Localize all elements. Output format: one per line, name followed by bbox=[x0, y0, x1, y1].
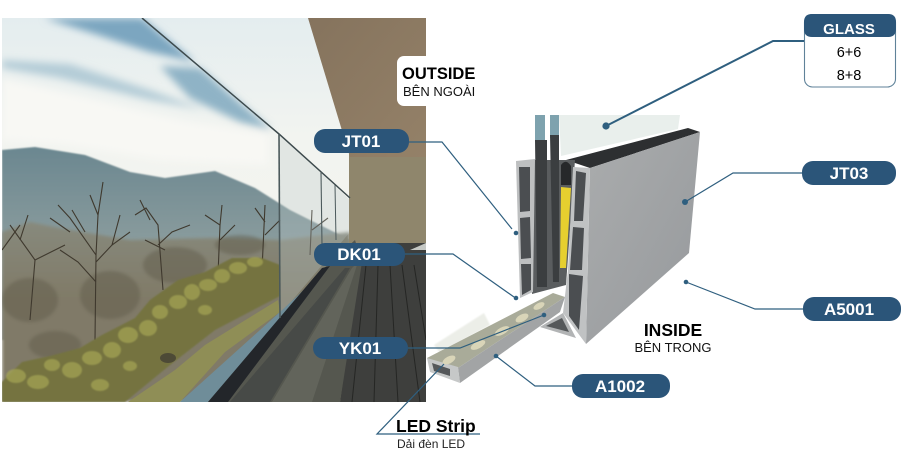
leader line bbox=[685, 173, 802, 202]
callout: A1002 bbox=[494, 354, 670, 398]
bushes bbox=[2, 258, 280, 402]
pill bbox=[314, 129, 409, 153]
deck boards bbox=[352, 265, 426, 402]
left chambers bbox=[519, 167, 531, 295]
outside vietnamese label: BÊN NGOÀI bbox=[403, 84, 475, 99]
leader line bbox=[405, 254, 514, 297]
dot bbox=[514, 231, 518, 235]
pill bbox=[802, 161, 896, 185]
pill label: DK01 bbox=[337, 245, 381, 264]
leader line bbox=[408, 315, 544, 348]
forest canopy shading bbox=[2, 235, 265, 359]
glass size 8+8: 8+8 bbox=[837, 68, 861, 84]
base foot bbox=[540, 313, 576, 338]
ceiling overhang bbox=[308, 18, 426, 157]
pill bbox=[572, 374, 670, 398]
right profile wall bbox=[563, 167, 590, 344]
glass box bbox=[804, 14, 896, 87]
pill bbox=[803, 297, 901, 321]
dot bbox=[602, 122, 610, 130]
glazing gaskets bbox=[535, 135, 559, 287]
callout: LED Strip bbox=[377, 364, 480, 451]
LED profile end bbox=[427, 358, 460, 383]
callout: OUTSIDE bbox=[397, 56, 487, 106]
yellow spacer bbox=[560, 187, 571, 268]
glass edges bbox=[535, 115, 559, 142]
dark seal bbox=[561, 162, 571, 185]
leader line bbox=[408, 142, 512, 229]
pill bbox=[314, 243, 405, 266]
forest bbox=[2, 222, 350, 402]
outside backing bbox=[397, 56, 487, 106]
panel: product cross-section bbox=[427, 115, 700, 383]
deck bbox=[340, 243, 426, 402]
glass header bbox=[804, 14, 896, 37]
inside vietnamese label: BÊN TRONG bbox=[634, 340, 712, 355]
LED profile side bbox=[458, 297, 565, 383]
dark glass channel bbox=[208, 266, 330, 402]
glass posts bbox=[279, 134, 336, 318]
glass size 6+6: 6+6 bbox=[837, 45, 861, 61]
lawn bbox=[128, 300, 280, 402]
glass pane bbox=[559, 115, 680, 156]
dot bbox=[684, 280, 688, 284]
callout: GLASS bbox=[602, 14, 896, 130]
right chambers bbox=[569, 171, 586, 330]
wall bbox=[349, 150, 426, 246]
pill label: A1002 bbox=[595, 377, 645, 396]
pill bbox=[313, 337, 408, 359]
LED profile top bbox=[427, 293, 565, 371]
glass top rail bbox=[142, 18, 350, 198]
dot bbox=[494, 354, 498, 358]
pill label: YK01 bbox=[339, 339, 381, 358]
pill label: A5001 bbox=[824, 300, 874, 319]
dot bbox=[682, 199, 688, 205]
leader line bbox=[686, 282, 803, 309]
callout: INSIDE bbox=[634, 320, 712, 355]
glass title: GLASS bbox=[823, 21, 875, 38]
clouds and blue sky streaks bbox=[2, 18, 272, 132]
planter highlights bbox=[272, 262, 358, 402]
panel: balcony photo bbox=[2, 18, 426, 402]
pale floor highlight bbox=[410, 243, 426, 250]
pill label: JT03 bbox=[830, 164, 868, 183]
LED wires bbox=[434, 313, 490, 353]
front face panel bbox=[586, 132, 700, 344]
led label: LED Strip bbox=[396, 416, 476, 436]
dot bbox=[542, 313, 546, 317]
rear shadow and interior bbox=[530, 160, 575, 294]
left profile wall bbox=[516, 159, 535, 298]
planter ledge bbox=[208, 240, 362, 402]
leader line bbox=[377, 364, 480, 434]
callout: JT01 bbox=[314, 129, 518, 235]
leader line bbox=[606, 41, 805, 126]
bare trees bbox=[2, 182, 328, 340]
glass base reflection bbox=[180, 291, 302, 402]
bush highlights bbox=[6, 257, 263, 391]
dot bbox=[514, 296, 518, 300]
mountains bbox=[2, 147, 350, 340]
LED chips bbox=[441, 301, 546, 366]
shrub shadow bbox=[160, 353, 176, 363]
callout: JT03 bbox=[682, 161, 896, 205]
outside label: OUTSIDE bbox=[402, 65, 475, 83]
callout: A5001 bbox=[684, 280, 901, 321]
inside label: INSIDE bbox=[644, 320, 702, 340]
leader line bbox=[496, 356, 572, 386]
glass tint bbox=[279, 134, 350, 315]
callout: DK01 bbox=[314, 243, 518, 300]
black top gasket bbox=[566, 128, 700, 168]
callout: YK01 bbox=[313, 313, 546, 359]
pill label: JT01 bbox=[342, 132, 380, 151]
led vietnamese label: Dải đèn LED bbox=[397, 437, 465, 451]
sky bbox=[2, 18, 349, 232]
